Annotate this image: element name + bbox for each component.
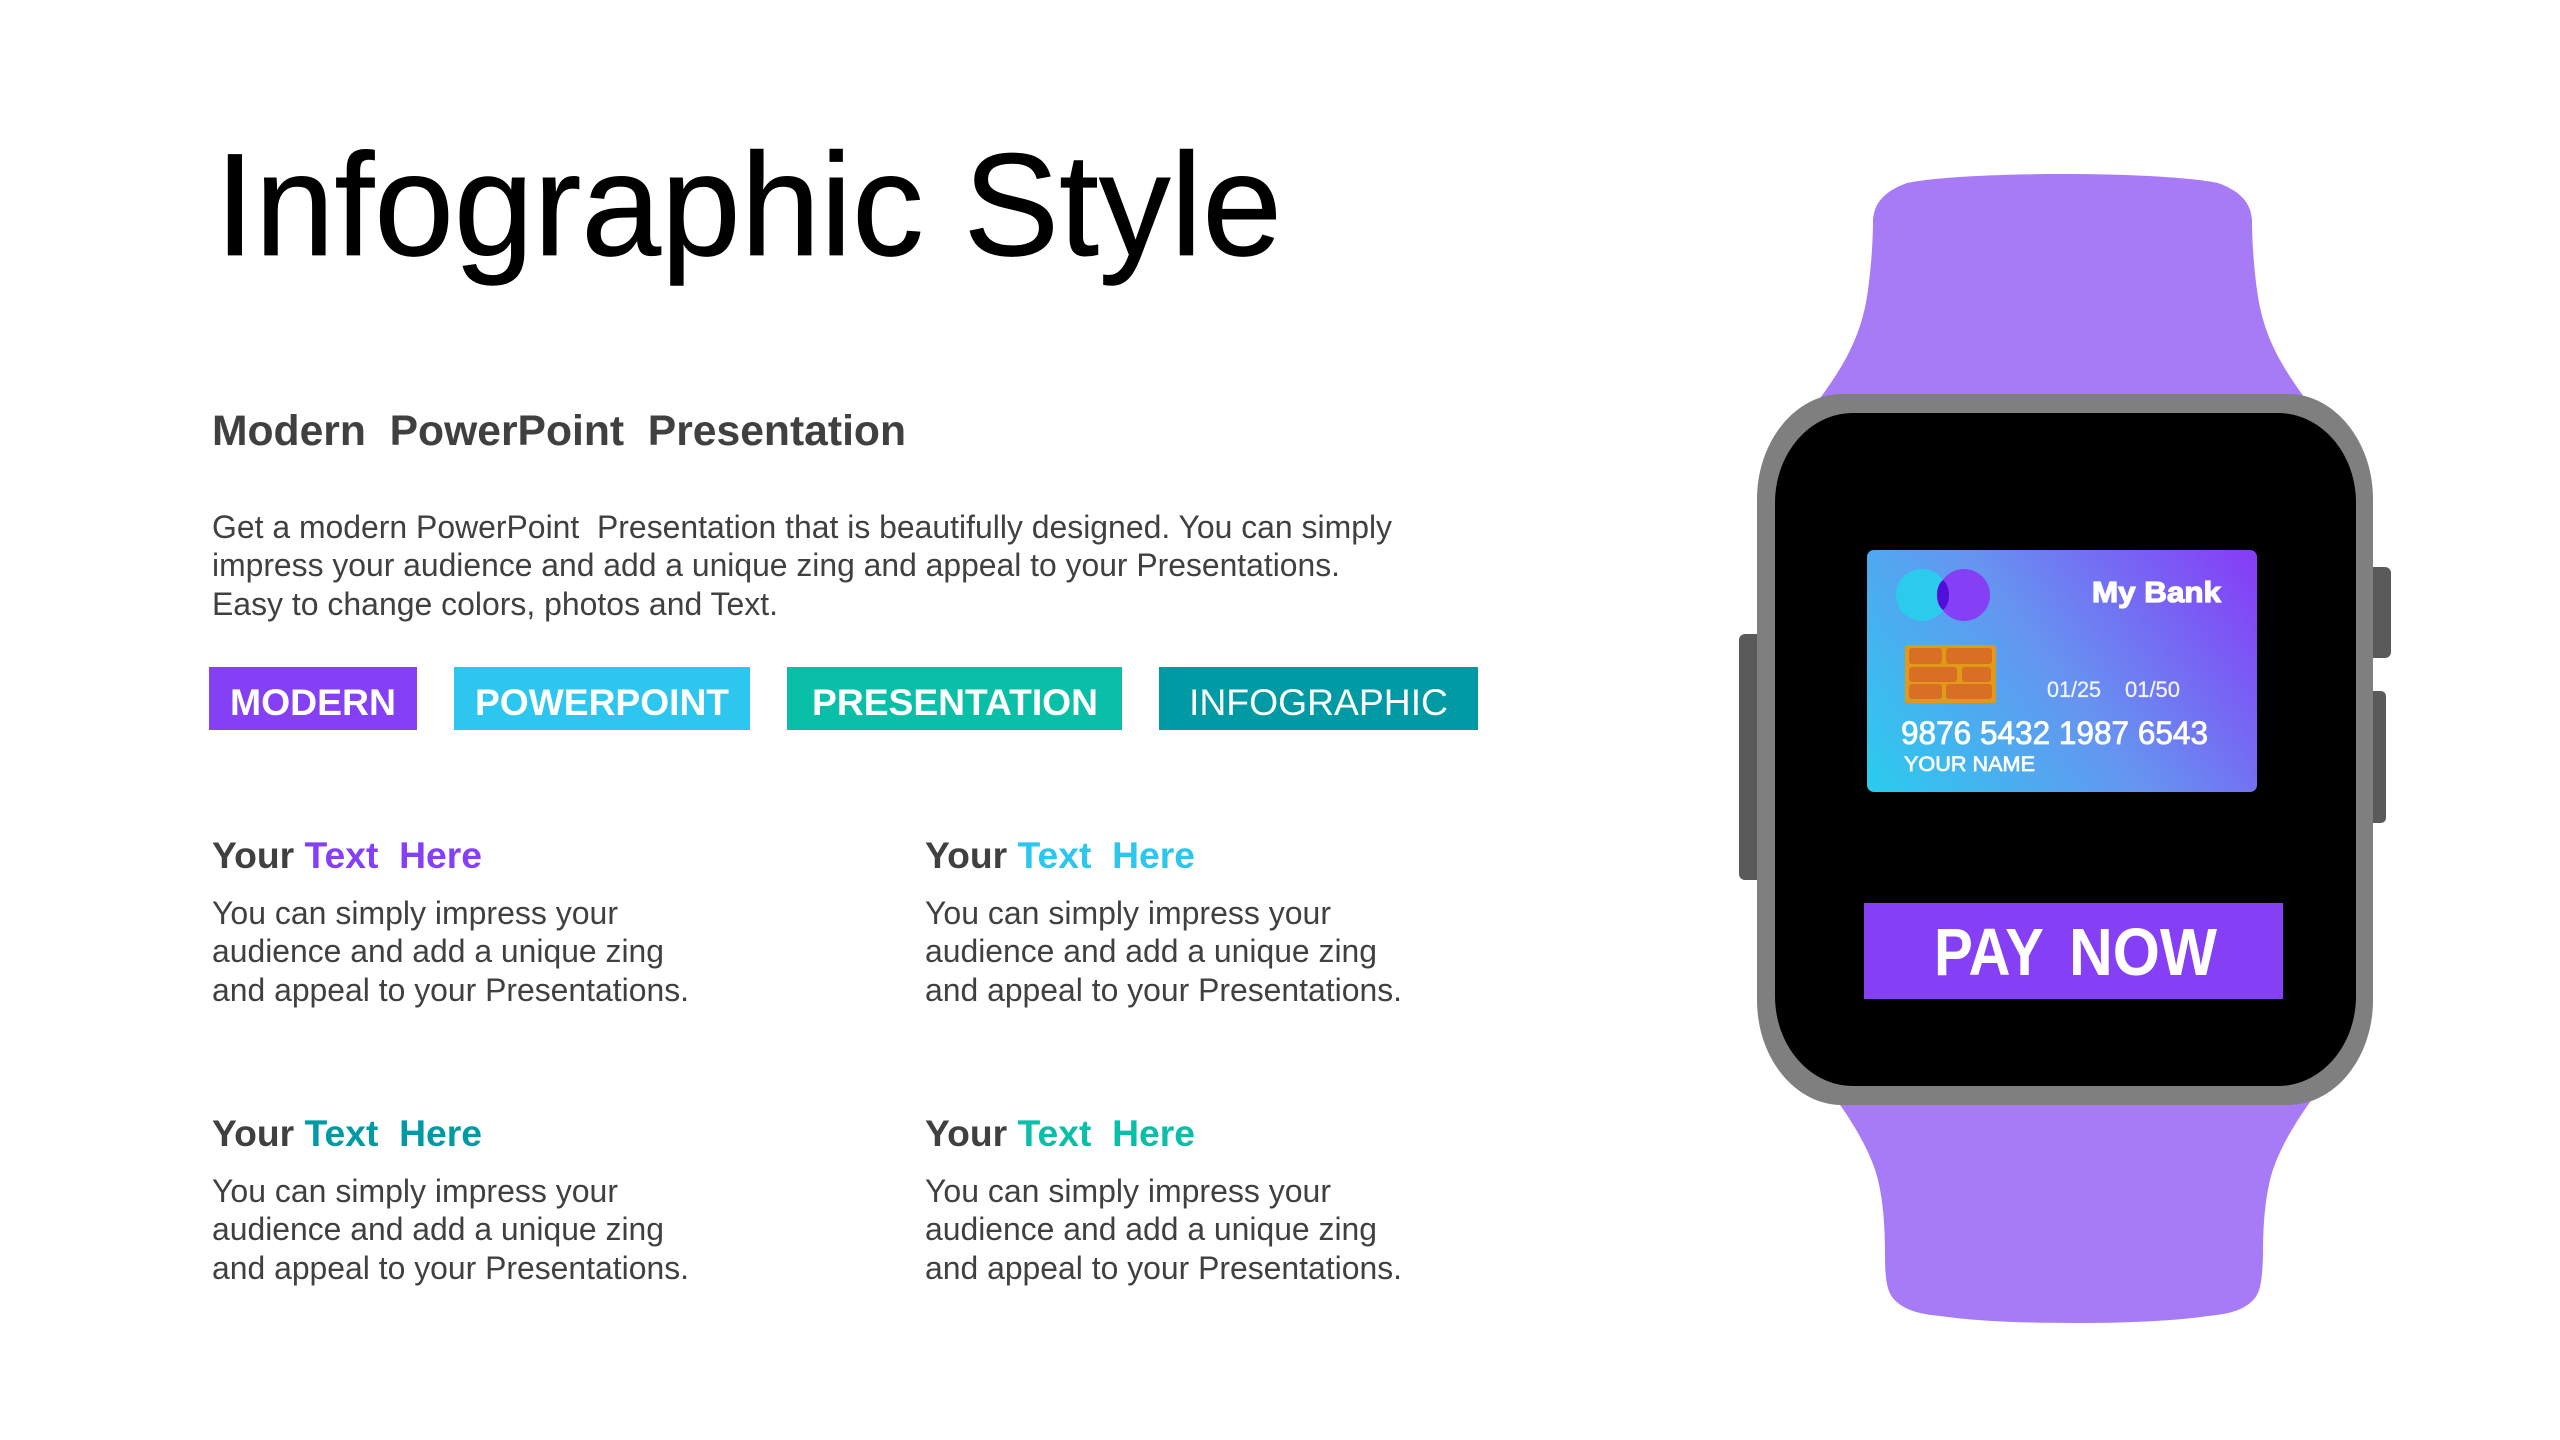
watch screen — [1775, 413, 2356, 1086]
text block: top right: and appeal to your Presentations. — [925, 972, 1402, 1008]
text block: bottom left: Your Text Here — [212, 1113, 482, 1154]
text block: bottom left: audience and add a unique zing — [212, 1211, 664, 1247]
card dates — [2047, 677, 2180, 702]
watch case — [1757, 394, 2373, 1105]
text block: top right — [925, 835, 1402, 1008]
text block: bottom left — [212, 1113, 689, 1286]
credit card — [1867, 550, 2257, 792]
card number: 9876 5432 1987 6543 — [1901, 715, 2208, 751]
card holder name: YOUR NAME — [1904, 753, 2035, 776]
text block: bottom right: Your Text Here — [925, 1113, 1195, 1154]
side button: upper right — [2366, 567, 2391, 658]
side button: left — [1739, 634, 1763, 880]
card dates: 01/25 — [2047, 677, 2101, 702]
text block: top left: You can simply impress your — [212, 895, 618, 931]
title: Infographic Style — [215, 123, 1282, 286]
tag: infographic — [1159, 667, 1478, 730]
tag: powerpoint: POWERPOINT — [475, 681, 729, 723]
tag: infographic: INFOGRAPHIC — [1189, 681, 1448, 723]
intro paragraph: impress your audience and add a unique zing and appeal to your Presentations. — [212, 547, 1340, 583]
text block: bottom left: and appeal to your Presentations. — [212, 1250, 689, 1286]
text block: bottom right: audience and add a unique zing — [925, 1211, 1377, 1247]
side button: lower right — [2366, 691, 2386, 823]
watch strap: top — [1815, 174, 2310, 405]
text block: bottom right: and appeal to your Presentations. — [925, 1250, 1402, 1286]
card logo — [1896, 569, 1990, 621]
bank name: My Bank — [2092, 577, 2222, 609]
intro paragraph: Easy to change colors, photos and Text. — [212, 586, 778, 622]
intro paragraph — [212, 509, 1392, 622]
text block: bottom right — [925, 1113, 1402, 1286]
pay now button: PAY — [1934, 915, 2044, 990]
pay now button: NOW — [2069, 915, 2218, 990]
tag: presentation — [787, 667, 1122, 730]
intro paragraph: Get a modern PowerPoint Presentation that is beautifully designed. You can simply — [212, 509, 1392, 545]
card chip — [1905, 645, 1996, 703]
text block: top right: You can simply impress your — [925, 895, 1331, 931]
text block: bottom right: You can simply impress your — [925, 1173, 1331, 1209]
card dates: 01/50 — [2125, 677, 2180, 702]
tag: modern — [209, 667, 417, 730]
subtitle: Modern PowerPoint Presentation — [212, 407, 906, 455]
text block: top left — [212, 835, 689, 1008]
pay now button — [1864, 903, 2283, 999]
text block: top right: audience and add a unique zing — [925, 933, 1377, 969]
text block: top left: Your Text Here — [212, 835, 482, 876]
tag: modern: MODERN — [230, 681, 396, 723]
tag: presentation: PRESENTATION — [812, 681, 1098, 723]
text block: bottom left: You can simply impress your — [212, 1173, 618, 1209]
smartwatch — [1739, 174, 2391, 1323]
text block: top left: audience and add a unique zing — [212, 933, 664, 969]
watch strap: bottom — [1828, 1090, 2320, 1323]
tag: powerpoint — [454, 667, 750, 730]
text block: top left: and appeal to your Presentations. — [212, 972, 689, 1008]
text block: top right: Your Text Here — [925, 835, 1195, 876]
